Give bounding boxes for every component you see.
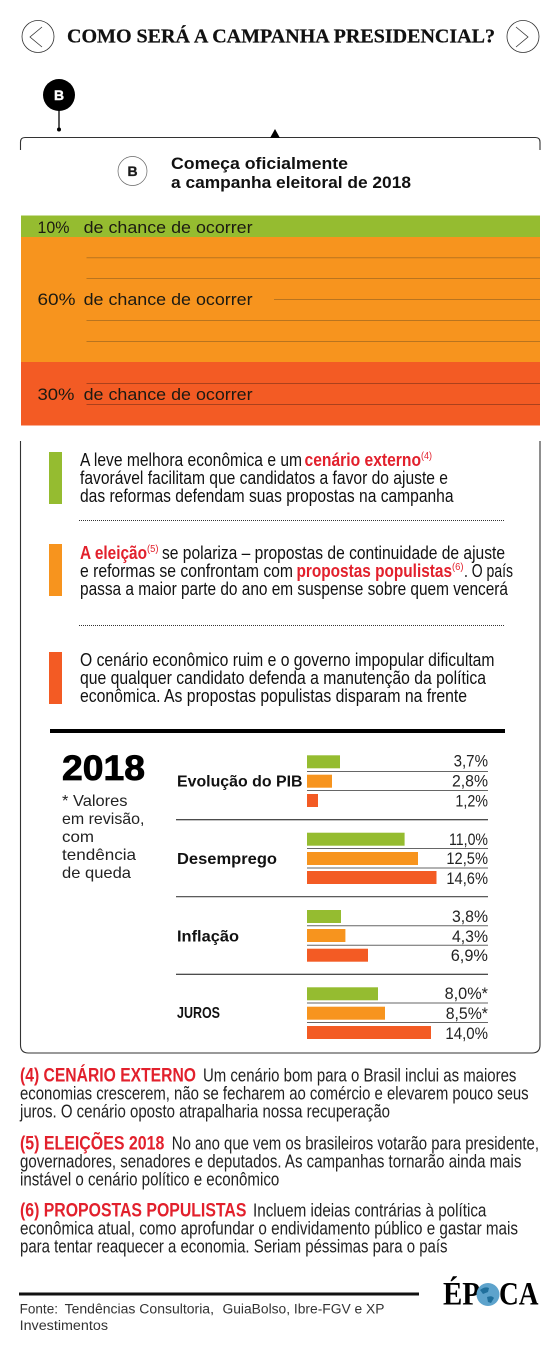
footnote 6: (6) PROPOSTAS POPULISTAS — [20, 1201, 246, 1222]
panel: scenario frame — [20, 138, 540, 1053]
band: 30% chance: 30% — [38, 386, 75, 404]
chart heading: 2018 and note: * Valores — [62, 793, 128, 810]
scenario text: orange: A eleição — [80, 542, 147, 563]
chart group: Desemprego: 11,0% — [449, 830, 488, 849]
source: Fonte: — [20, 1302, 58, 1317]
band: 60% chance: de chance de ocorrer — [84, 291, 253, 309]
chart group: Inflação: 6,9% — [451, 946, 488, 965]
scenario text: green: das reformas defendam suas propostas na campanha — [80, 485, 454, 506]
band: 60% chance: 60% — [38, 291, 76, 309]
scenario text: red — [49, 649, 494, 706]
scenario text: orange: (6) — [452, 562, 464, 573]
icon: next arrow — [507, 20, 539, 52]
scenario text: orange: (5) — [147, 544, 158, 555]
chart group: Inflação: 3,8% — [452, 907, 488, 926]
footnote 5: (5) ELEIÇÕES 2018 — [20, 1132, 164, 1154]
timeline marker B — [43, 79, 75, 132]
band: 60% chance — [21, 237, 540, 362]
chart group: Inflação — [177, 907, 488, 965]
scenario text: green: favorável facilitam que candidatos a favor do ajuste e — [80, 467, 448, 488]
chart group: Juros: JUROS — [177, 1005, 220, 1022]
logo: ÉPOCA: ÉP — [443, 1276, 480, 1312]
icon: pointer triangle — [270, 129, 280, 138]
scenario text: orange: . O país — [464, 560, 513, 581]
scenario text: orange — [49, 542, 513, 599]
scenario text: green: cenário externo — [304, 449, 421, 470]
logo: ÉPOCA: CA — [499, 1276, 539, 1312]
chart group: Desemprego: Desemprego — [177, 851, 277, 868]
footnote 6 — [20, 1200, 518, 1257]
scenario text: green — [49, 449, 454, 506]
source: Investimentos — [20, 1318, 108, 1333]
chart group: Juros: 8,5%* — [446, 1004, 488, 1023]
source — [20, 1302, 384, 1333]
chart heading: 2018 and note: tendência — [62, 847, 136, 864]
heading: a campanha eleitoral de 2018 — [171, 173, 411, 192]
band: 10% chance: 10% — [38, 219, 70, 237]
chart heading: 2018 and note: 2018 — [62, 749, 145, 788]
band: 10% chance: de chance de ocorrer — [84, 219, 253, 237]
scenario text: orange: propostas populistas — [296, 560, 452, 581]
scenario text: green: (4) — [421, 451, 432, 462]
icon: previous arrow — [22, 20, 54, 52]
source: Tendências Consultoria, — [65, 1302, 214, 1317]
footnote 5: instável o cenário político e econômico — [20, 1168, 279, 1190]
chart group: Juros — [177, 984, 488, 1043]
chart heading: 2018 and note: de queda — [62, 865, 131, 882]
footnote 6: Incluem ideias contrárias à política — [253, 1200, 487, 1221]
heading — [171, 154, 411, 192]
chart group: Desemprego: 12,5% — [446, 849, 488, 868]
panel: probability bands — [21, 216, 540, 426]
footnote 4: (4) CENÁRIO EXTERNO — [20, 1065, 196, 1087]
chart group: Evolução do PIB — [177, 752, 488, 811]
chart group: Evolução do PIB: 1,2% — [455, 792, 488, 811]
footnote 4: juros. O cenário oposto atrapalharia nossa recuperação — [19, 1101, 390, 1122]
footnote 4 — [19, 1065, 529, 1122]
scenario text: red: que qualquer candidato defenda a manutenção da política — [80, 667, 487, 688]
chart heading: 2018 and note: em revisão, — [62, 811, 144, 828]
band: 30% chance: de chance de ocorrer — [84, 386, 253, 404]
scenario text: green: A leve melhora econômica e um — [80, 449, 302, 470]
heading: Começa oficialmente — [171, 154, 348, 173]
chart group: Evolução do PIB: 2,8% — [452, 772, 488, 790]
icon: small B badge — [118, 156, 147, 186]
band: 30% chance — [21, 362, 540, 426]
chart heading: 2018 and note — [62, 749, 145, 882]
chart group: Evolução do PIB: Evolução do PIB — [177, 774, 302, 790]
chart group: Desemprego — [177, 830, 488, 888]
title: COMO SERÁ A CAMPANHA PRESIDENCIAL? — [67, 26, 495, 48]
scenario text: red: O cenário econômico ruim e o governo impopular dificultam — [80, 649, 494, 670]
chart group: Juros: 8,0%* — [445, 984, 488, 1003]
logo: ÉPOCA — [443, 1276, 539, 1312]
chart group: Juros: 14,0% — [445, 1024, 488, 1043]
scenario text: orange: e reformas se confrontam com — [80, 560, 293, 581]
scenario text: red: econômica. As propostas populistas disparam na frente — [80, 685, 467, 706]
chart heading: 2018 and note: com — [62, 829, 94, 846]
footnote 6: para tentar reaquecer a economia. Seriam péssimas para o país — [20, 1236, 448, 1257]
source: GuiaBolso, Ibre-FGV e XP — [222, 1302, 384, 1317]
chart group: Evolução do PIB: 3,7% — [454, 752, 488, 771]
scenario text: orange: se polariza – propostas de continuidade de ajuste — [162, 542, 505, 563]
chart group: Desemprego: 14,6% — [446, 869, 488, 888]
bar chart: scenario indicators — [176, 752, 488, 1043]
band: 10% chance — [21, 216, 540, 237]
icon: small B badge: B — [127, 163, 138, 179]
chart group: Inflação: Inflação — [177, 929, 239, 946]
timeline marker B: B — [54, 87, 64, 103]
chart group: Inflação: 4,3% — [452, 927, 488, 946]
footnote 5 — [20, 1132, 539, 1190]
